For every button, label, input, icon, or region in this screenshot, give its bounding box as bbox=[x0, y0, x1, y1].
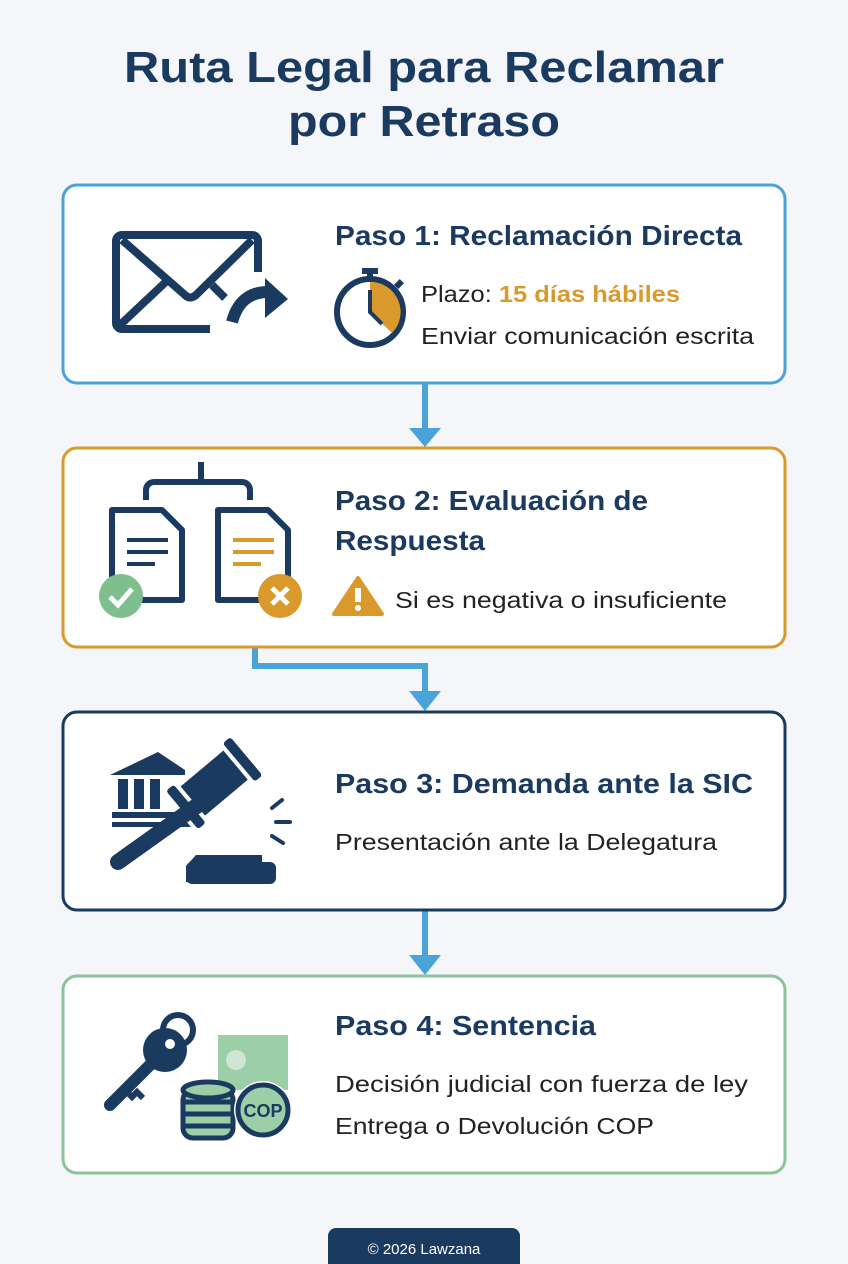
panel: step 1 bbox=[63, 185, 785, 383]
icon: gavel and court bbox=[110, 734, 290, 884]
title bbox=[124, 43, 724, 146]
text: enviar: Enviar comunicación escrita bbox=[421, 323, 754, 349]
text: plazo: Plazo: 15 días hábiles bbox=[421, 281, 680, 307]
footer: © 2026 Lawzana bbox=[368, 1241, 481, 1258]
panel: step 2 bbox=[63, 448, 785, 647]
text: entrega: Entrega o Devolución COP bbox=[335, 1113, 654, 1139]
heading: Paso 2: Evaluación de bbox=[335, 485, 648, 516]
footer bbox=[328, 1228, 520, 1264]
icon: documents bbox=[99, 462, 302, 618]
icon: key and money bbox=[110, 1015, 292, 1139]
icon: key and money: COP bbox=[243, 1101, 283, 1121]
panel: step 4 bbox=[63, 976, 785, 1173]
arrow: step 1 to 2 bbox=[409, 384, 441, 447]
title: Ruta Legal para Reclamar bbox=[124, 43, 724, 92]
icon: envelope bbox=[116, 235, 288, 329]
icon: warning bbox=[334, 578, 382, 614]
heading: Paso 3: Demanda ante la SIC bbox=[335, 768, 753, 799]
text: decision: Decisión judicial con fuerza de ley bbox=[335, 1071, 749, 1097]
title: por Retraso bbox=[288, 97, 560, 146]
arrow: step 3 to 4 bbox=[409, 911, 441, 975]
panel: step 2: Respuesta bbox=[335, 525, 485, 556]
arrow: step 2 to 3 bbox=[252, 620, 441, 711]
text: condicion: Si es negativa o insuficiente bbox=[395, 587, 727, 613]
text: presentacion: Presentación ante la Delegatura bbox=[335, 829, 717, 855]
icon: stopwatch bbox=[337, 268, 404, 345]
panel: step 3 bbox=[63, 712, 785, 910]
heading: Paso 1: Reclamación Directa bbox=[335, 220, 742, 251]
heading: Paso 4: Sentencia bbox=[335, 1010, 596, 1041]
